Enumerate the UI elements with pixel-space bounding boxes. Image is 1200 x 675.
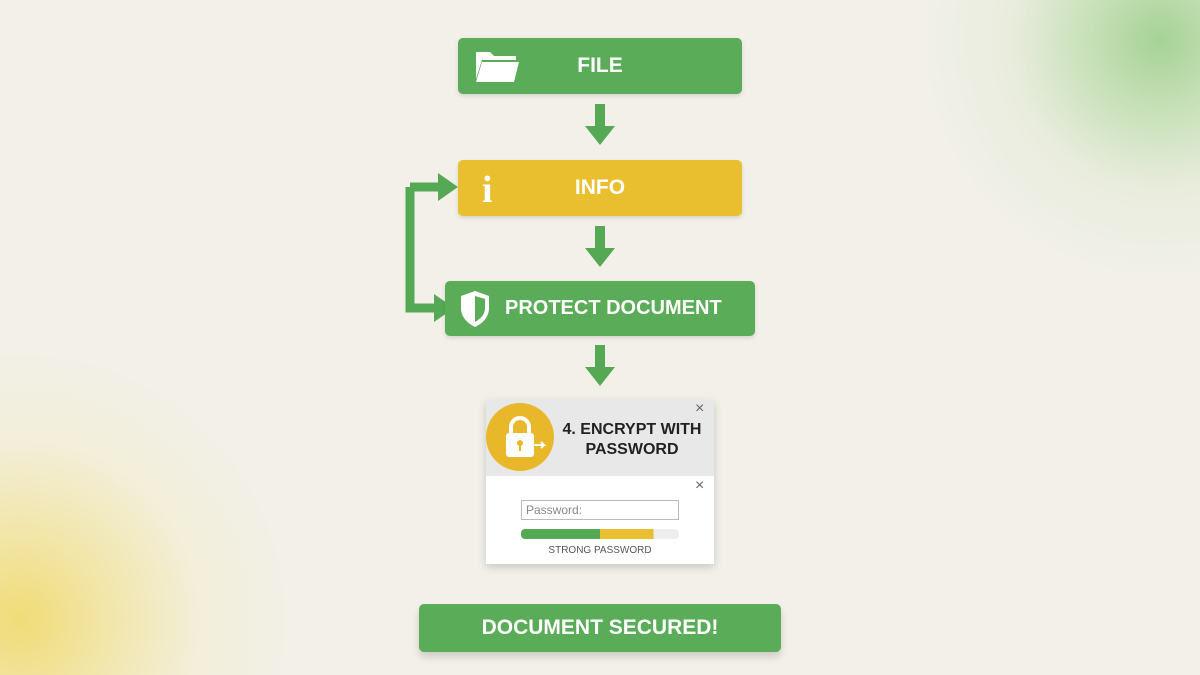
dialog: encrypt with password [486,400,714,564]
loop arrow [406,173,458,322]
step: file: FILE [577,54,623,77]
step: file [458,38,742,94]
icon: lock [486,403,554,471]
password input [521,500,679,520]
dialog header [486,400,714,476]
icon: info: i [482,169,493,211]
arrow 3 [585,345,615,386]
final: document secured: DOCUMENT SECURED! [482,616,718,639]
close icon: × [695,400,704,417]
step: protect document: PROTECT DOCUMENT [505,297,722,319]
close icon 2: × [695,477,704,494]
step: info [458,160,742,216]
final: document secured [419,604,781,652]
arrow 1 [585,104,615,145]
arrow 2 [585,226,615,267]
password input: Password: [526,503,582,517]
strength bar [521,529,679,539]
heading: 4. ENCRYPT WITH PASSWORD [563,421,701,458]
step: protect document [445,281,755,336]
icon: shield [461,291,489,327]
icon: folder [476,52,519,82]
step: info: INFO [575,176,625,199]
strength label: STRONG PASSWORD [548,545,652,556]
